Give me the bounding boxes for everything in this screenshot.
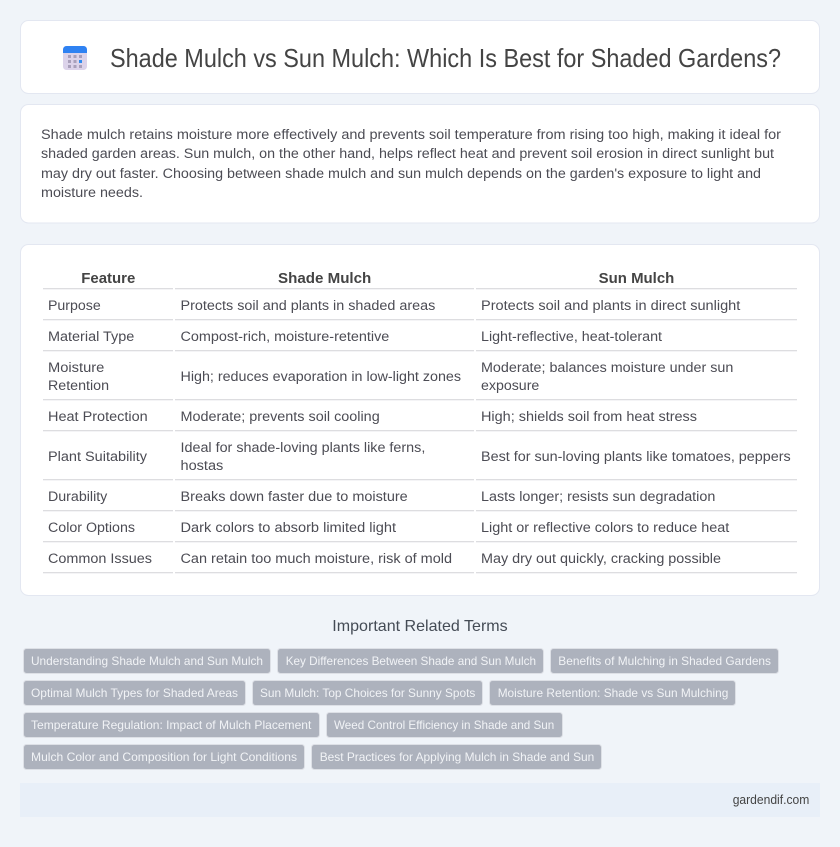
table header row <box>81 271 674 287</box>
row: heat protection: Heat Protection <box>48 409 148 425</box>
tag: Optimal Mulch Types for Shaded Areas <box>31 686 238 700</box>
tag: Best Practices for Applying Mulch in Shade and Sun <box>320 750 594 764</box>
row: plant suitability: hostas <box>180 458 223 474</box>
tag <box>278 648 544 674</box>
tag: Understanding Shade Mulch and Sun Mulch <box>31 654 263 668</box>
row: common issues: Can retain too much moisture, risk of mold <box>180 551 452 567</box>
row: moisture retention: Retention <box>48 378 109 394</box>
row: moisture retention: High; reduces evaporation in low-light zones <box>180 369 461 385</box>
row: purpose <box>48 298 740 314</box>
row: purpose: Protects soil and plants in shaded areas <box>180 298 435 314</box>
panel: intro text: moisture needs. <box>41 185 143 201</box>
table header row: Feature <box>81 271 135 287</box>
row: purpose: Purpose <box>48 298 101 314</box>
row: color options: Color Options <box>48 520 135 536</box>
row: plant suitability <box>48 440 791 474</box>
heading: important related terms: Important Related Terms <box>332 618 508 635</box>
row: moisture retention <box>48 360 733 394</box>
tag: Mulch Color and Composition for Light Conditions <box>31 750 297 764</box>
tag <box>24 648 270 674</box>
panel: intro text: shaded garden areas. Sun mulch, on the other hand, helps reflect heat and prevent soil erosion in direct sunlight but <box>41 146 774 162</box>
table header row: Sun Mulch <box>599 271 674 287</box>
row: material type <box>48 329 662 345</box>
row: common issues <box>48 551 721 567</box>
tag <box>326 712 562 738</box>
panel: related term tags <box>24 648 778 770</box>
tag <box>550 648 778 674</box>
row: durability <box>48 489 715 505</box>
row: heat protection <box>48 409 697 425</box>
row: plant suitability: Plant Suitability <box>48 449 148 465</box>
panel: title card <box>20 20 820 94</box>
tag: Sun Mulch: Top Choices for Sunny Spots <box>260 686 475 700</box>
tag <box>490 680 736 706</box>
row: common issues: May dry out quickly, cracking possible <box>481 551 721 567</box>
row: heat protection: Moderate; prevents soil cooling <box>180 409 380 425</box>
title: Shade Mulch vs Sun Mulch: Which Is Best for Shaded Gardens? <box>110 45 781 73</box>
tag <box>24 744 304 770</box>
row: durability: Durability <box>48 489 108 505</box>
row: plant suitability: Ideal for shade-loving plants like ferns, <box>180 440 425 456</box>
row: material type: Material Type <box>48 329 134 345</box>
row: material type: Light-reflective, heat-tolerant <box>481 329 662 345</box>
row: plant suitability: Best for sun-loving plants like tomatoes, peppers <box>481 449 791 465</box>
row: material type: Compost-rich, moisture-retentive <box>180 329 389 345</box>
row: color options: Light or reflective colors to reduce heat <box>481 520 729 536</box>
panel: comparison table <box>20 244 820 596</box>
row: common issues: Common Issues <box>48 551 152 567</box>
tag <box>24 712 320 738</box>
row: heat protection: High; shields soil from heat stress <box>481 409 697 425</box>
row: color options: Dark colors to absorb limited light <box>180 520 396 536</box>
footer <box>20 783 820 817</box>
panel: intro text <box>20 104 820 223</box>
row: color options <box>48 520 729 536</box>
row: moisture retention: Moisture <box>48 360 104 376</box>
tag <box>252 680 482 706</box>
icon: calendar <box>63 46 87 70</box>
tag: Moisture Retention: Shade vs Sun Mulching <box>498 686 728 700</box>
tag: Benefits of Mulching in Shaded Gardens <box>558 654 771 668</box>
table header row: Shade Mulch <box>278 271 371 287</box>
row: durability: Breaks down faster due to moisture <box>180 489 408 505</box>
panel: intro text: may dry out faster. Choosing between shade mulch and sun mulch depends on the garden's exposure to light and <box>41 166 761 182</box>
row: durability: Lasts longer; resists sun degradation <box>481 489 715 505</box>
tag <box>312 744 602 770</box>
tag <box>24 680 246 706</box>
row: purpose: Protects soil and plants in direct sunlight <box>481 298 740 314</box>
panel: intro text: Shade mulch retains moisture more effectively and prevents soil temperature from rising too high, making it ideal for <box>41 127 781 143</box>
row: moisture retention: exposure <box>481 378 539 394</box>
tag: Temperature Regulation: Impact of Mulch Placement <box>31 718 312 732</box>
tag: Key Differences Between Shade and Sun Mulch <box>286 654 536 668</box>
footer: gardendif.com <box>733 792 809 807</box>
tag: Weed Control Efficiency in Shade and Sun <box>334 718 554 732</box>
row: moisture retention: Moderate; balances moisture under sun <box>481 360 733 376</box>
